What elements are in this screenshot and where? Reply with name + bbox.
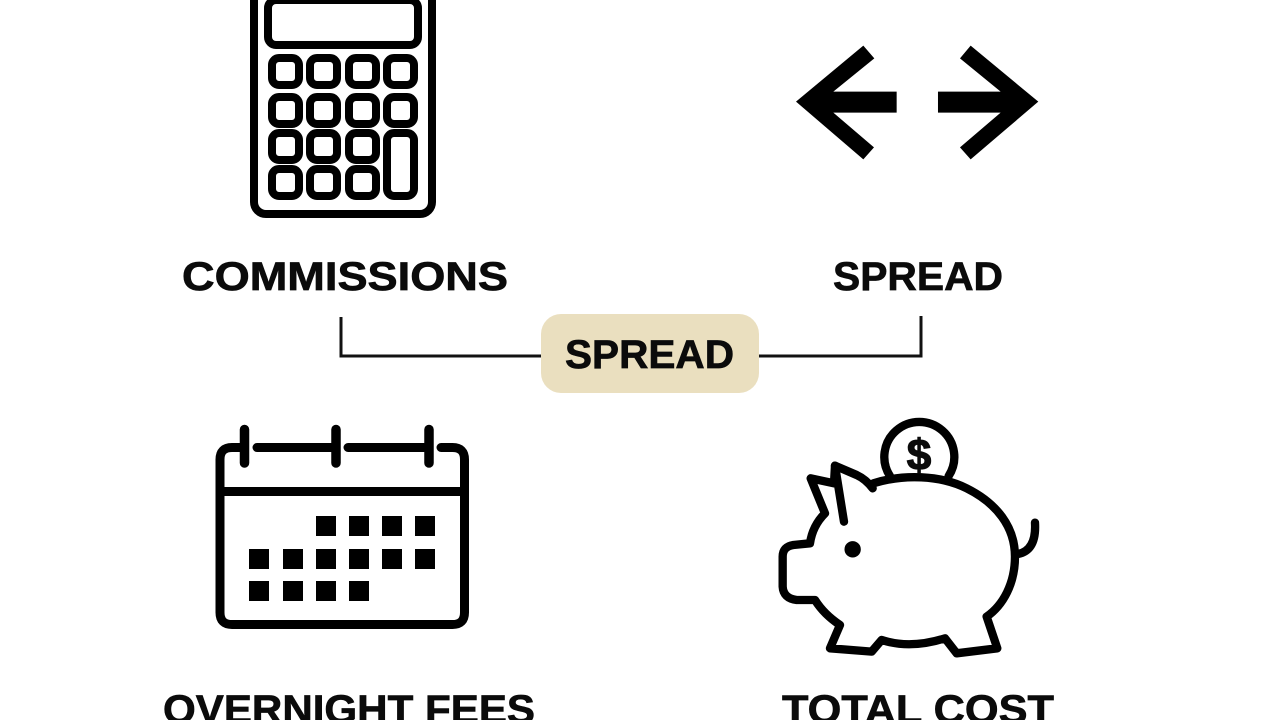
icon: piggy bank with coin bbox=[783, 422, 1035, 653]
heading: spread: SPREAD bbox=[833, 255, 1003, 299]
connector bracket bbox=[341, 316, 921, 356]
callout: spread pill: SPREAD bbox=[565, 333, 734, 377]
icon: left and right arrows bbox=[796, 46, 1038, 159]
callout: spread pill bbox=[541, 314, 759, 393]
icon: calendar bbox=[220, 430, 464, 624]
icon: piggy bank with coin: $ bbox=[907, 431, 931, 480]
icon: calculator bbox=[254, 0, 432, 214]
heading: commissions: COMMISSIONS bbox=[182, 255, 508, 299]
